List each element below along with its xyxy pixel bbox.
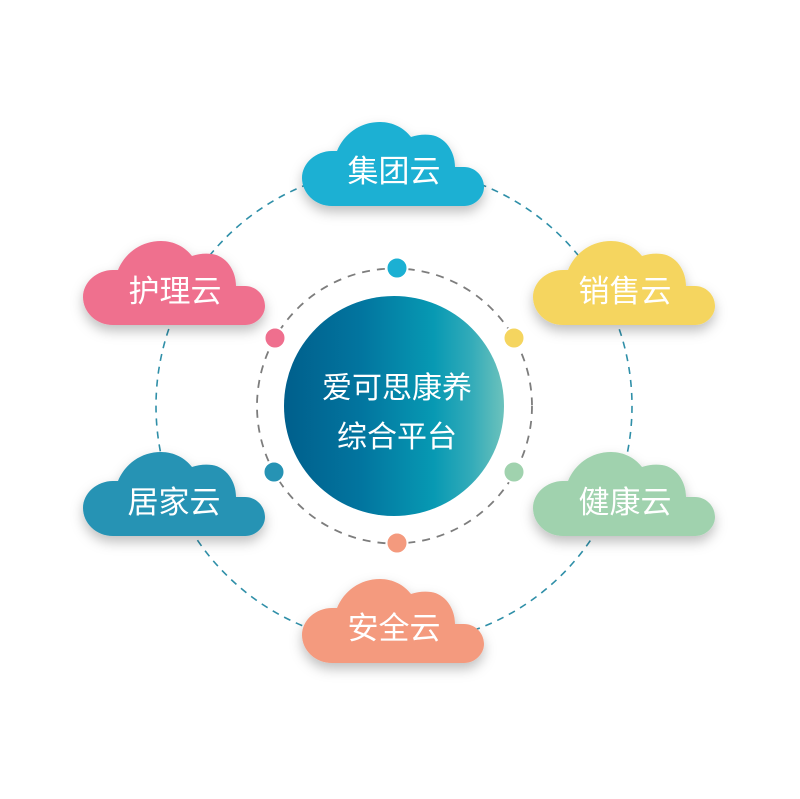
inner dashed ring (257, 268, 532, 544)
cloud: 护理云 (83, 241, 265, 325)
cloud: 集团云: 集团云 (348, 154, 440, 189)
cloud: 居家云 (83, 452, 265, 536)
cloud: 销售云 (533, 241, 715, 325)
cloud: 健康云 (533, 452, 715, 536)
ring node dots (264, 258, 524, 554)
cloud: 销售云: 销售云 (578, 274, 672, 309)
central gradient circle (284, 296, 504, 516)
central gradient circle: 爱可思康养 (322, 372, 472, 405)
cloud: 安全云: 安全云 (348, 611, 440, 646)
central gradient circle: 综合平台 (337, 421, 457, 454)
cloud: 护理云: 护理云 (128, 274, 222, 309)
cloud: 安全云 (302, 579, 484, 663)
cloud: 集团云 (302, 122, 484, 206)
outer dashed ring (156, 168, 632, 644)
cloud: 健康云: 健康云 (578, 485, 672, 520)
cloud: 居家云: 居家云 (128, 485, 220, 520)
